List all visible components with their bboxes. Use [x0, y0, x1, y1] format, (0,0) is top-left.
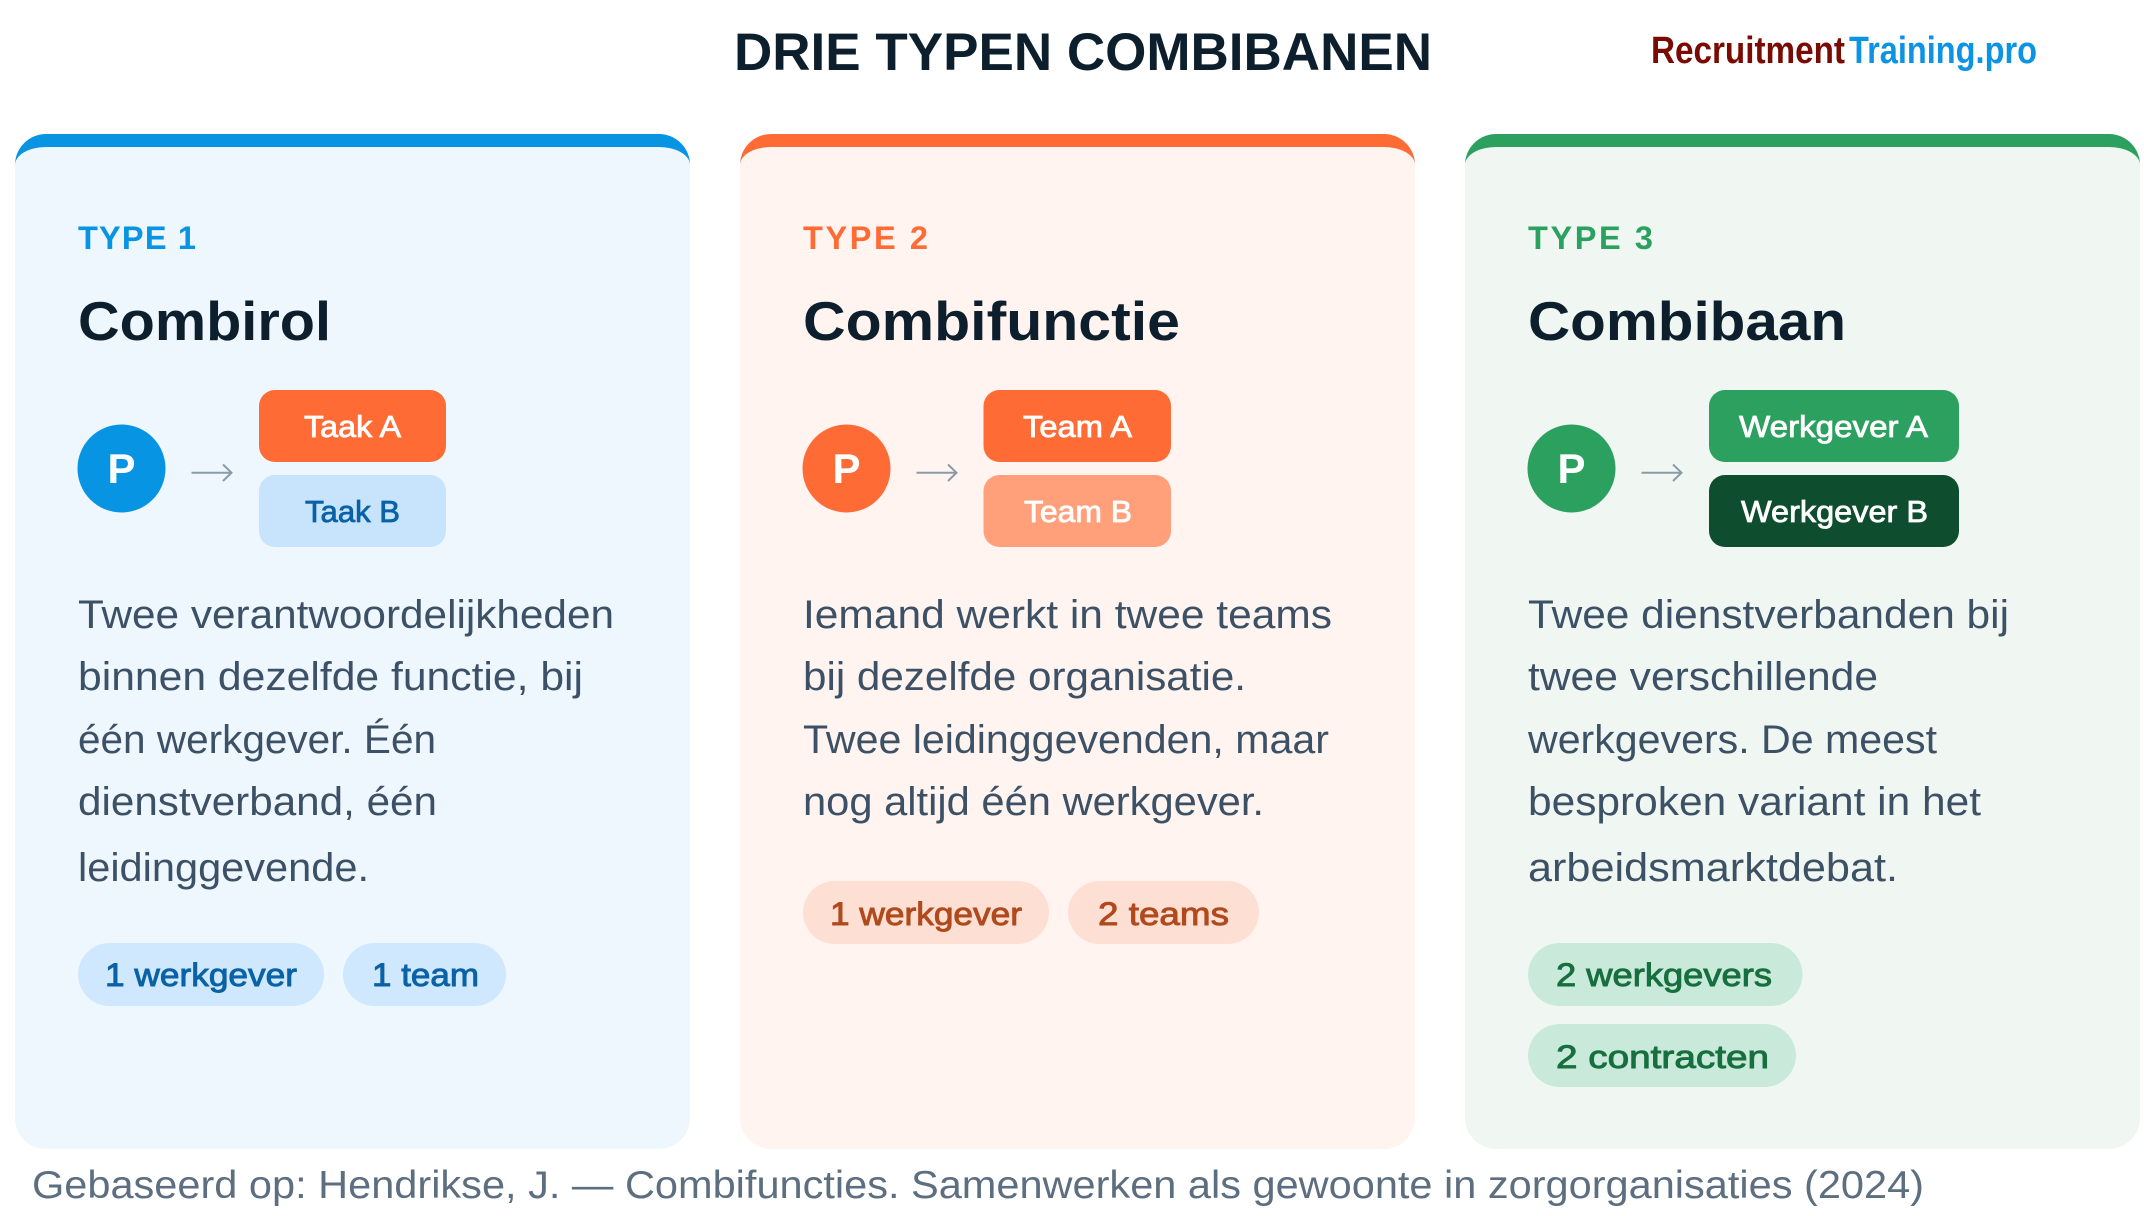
diagram: person to employers: [1528, 390, 1959, 547]
box: team b: Team B: [1024, 494, 1132, 529]
pill: 2 teams: 2 teams: [1098, 896, 1229, 932]
icon: person circle: P: [107, 445, 136, 492]
text block: description type 2: Iemand werkt in twee teams: [803, 593, 1332, 637]
text block: description type 2: nog altijd één werkgever.: [803, 780, 1264, 824]
text block: description type 1: binnen dezelfde functie, bij: [78, 655, 583, 699]
box: taak a: [259, 390, 446, 462]
box: team a: Team A: [1023, 409, 1132, 444]
pill: 1 werkgever: [78, 943, 324, 1006]
panel: type 1 combirol: [15, 134, 690, 1149]
logo: RecruitmentTraining.pro: [1651, 30, 2037, 72]
text block: description type 3: besproken variant in het: [1528, 780, 1981, 824]
pill: 2 werkgevers: [1528, 943, 1802, 1006]
box: taak a: Taak A: [304, 409, 401, 444]
diagram: person to teams: [802, 390, 1171, 547]
title: DRIE TYPEN COMBIBANEN: [734, 23, 1432, 82]
pill: 2 werkgevers: 2 werkgevers: [1556, 957, 1772, 993]
arrow: [916, 464, 956, 481]
arrow: [192, 464, 232, 481]
pill: 2 contracten: 2 contracten: [1556, 1039, 1769, 1075]
icon: person circle: [802, 424, 890, 512]
text block: description type 3: twee verschillende: [1528, 655, 1878, 699]
pill: 2 contracten: [1528, 1024, 1796, 1087]
box: taak b: [259, 475, 446, 547]
label: type 2: TYPE 2: [803, 220, 928, 256]
text block: description type 1: dienstverband, één: [78, 780, 437, 824]
pill: 1 werkgever: [803, 881, 1049, 944]
text block: description type 1: Twee verantwoordelijkheden: [78, 593, 614, 637]
pill: 1 team: [343, 943, 506, 1006]
label: type 3: TYPE 3: [1528, 220, 1653, 256]
footer source: Gebaseerd op: Hendrikse, J. — Combifuncties. Samenwerken als gewoonte in zorgorganisaties (2024): [32, 1164, 1924, 1207]
label: type 1: TYPE 1: [78, 220, 196, 256]
box: taak b: Taak B: [305, 494, 400, 529]
icon: person circle: [1528, 424, 1616, 512]
heading: combibaan: Combibaan: [1528, 290, 1846, 352]
pill: 2 teams: [1068, 881, 1259, 944]
box: werkgever a: Werkgever A: [1739, 409, 1928, 444]
box: werkgever b: Werkgever B: [1741, 494, 1928, 529]
pill: 1 team: 1 team: [372, 957, 479, 993]
text block: description type 2: [803, 593, 1332, 824]
heading: combirol: Combirol: [78, 290, 331, 352]
logo: RecruitmentTraining.pro: Training.pro: [1849, 30, 2037, 72]
logo: RecruitmentTraining.pro: Recruitment: [1651, 30, 1845, 72]
text block: description type 1: [78, 593, 614, 890]
icon: person circle: P: [1557, 445, 1586, 492]
box: team a: [984, 390, 1171, 462]
text block: description type 3: arbeidsmarktdebat.: [1528, 846, 1898, 890]
text block: description type 2: bij dezelfde organisatie.: [803, 655, 1246, 699]
diagram: person to tasks: [78, 390, 446, 547]
heading: combifunctie: Combifunctie: [803, 290, 1180, 352]
text block: description type 1: één werkgever. Één: [78, 718, 436, 762]
pill: 1 werkgever: 1 werkgever: [105, 957, 297, 993]
box: werkgever b: [1709, 475, 1959, 547]
text block: description type 1: leidinggevende.: [78, 846, 369, 890]
panel: type 2 combifunctie: [740, 134, 1415, 1149]
text block: description type 3: Twee dienstverbanden bij: [1528, 593, 2009, 637]
icon: person circle: P: [832, 445, 861, 492]
panel: type 3 combibaan: [1465, 134, 2140, 1149]
box: werkgever a: [1709, 390, 1959, 462]
arrow: [1642, 464, 1682, 481]
pill: 1 werkgever: 1 werkgever: [830, 896, 1022, 932]
text block: description type 2: Twee leidinggevenden, maar: [803, 718, 1329, 762]
text block: description type 3: werkgevers. De meest: [1527, 718, 1937, 762]
icon: person circle: [78, 424, 166, 512]
box: team b: [984, 475, 1171, 547]
text block: description type 3: [1527, 593, 2009, 890]
